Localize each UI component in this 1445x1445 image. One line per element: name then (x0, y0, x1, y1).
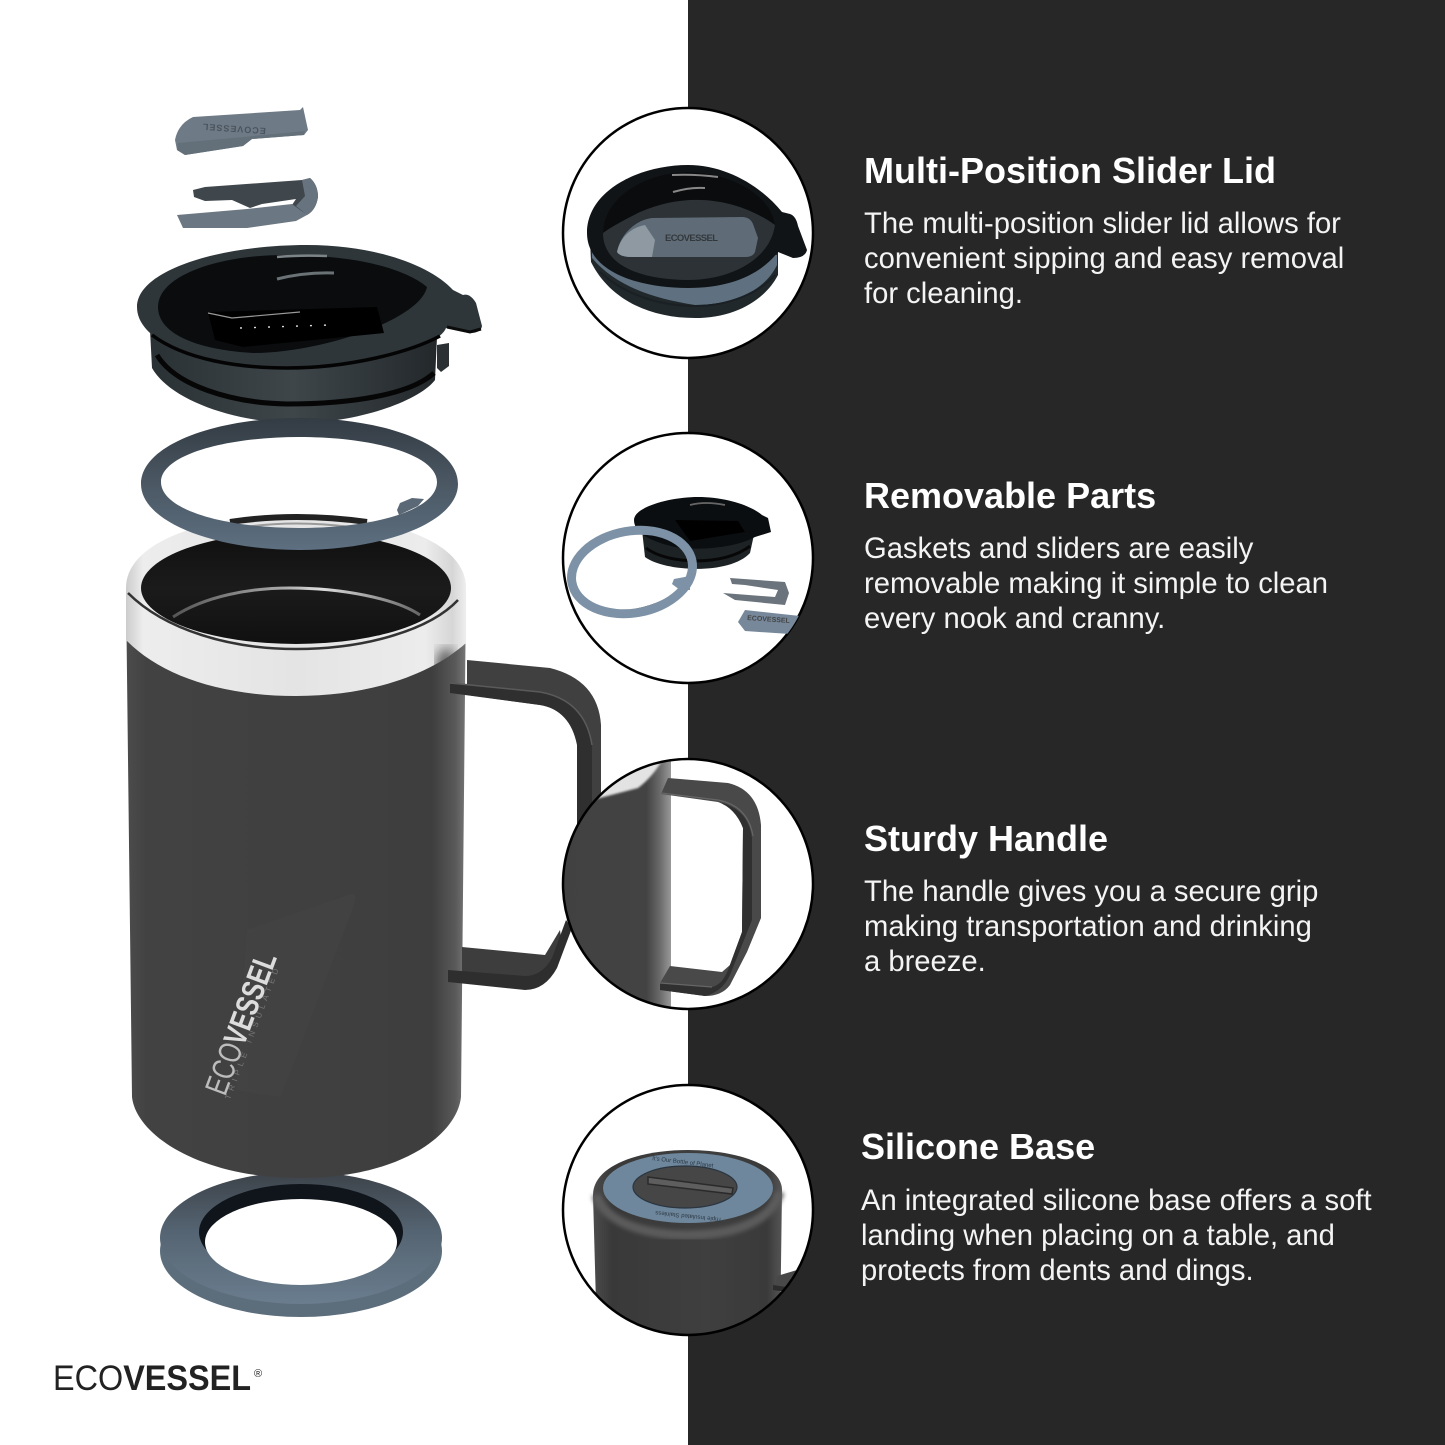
text block: sturdy handle (864, 818, 1318, 978)
mug handle (448, 660, 601, 990)
heading: Silicone Base (861, 1126, 1095, 1167)
rim band (126, 515, 466, 696)
small ring (567, 526, 697, 618)
slot (648, 1177, 733, 1194)
description: The handle gives you a secure grip (864, 876, 1318, 908)
description: every nook and cranny. (864, 603, 1165, 635)
zoomed handle (660, 778, 761, 996)
silicone ring (603, 1153, 773, 1223)
panel: base circle: Triple Insulated Stainless (655, 1209, 722, 1222)
handle stub (780, 1270, 796, 1287)
description: protects from dents and dings. (861, 1255, 1254, 1287)
icon: lower slider piece (177, 178, 318, 228)
description: convenient sipping and easy removal (864, 243, 1344, 275)
heading: Removable Parts (864, 475, 1156, 516)
panel: removable parts circle: ECOVESSEL (747, 615, 791, 625)
exploded mug illustration (126, 107, 601, 1317)
description: An integrated silicone base offers a soft (861, 1185, 1372, 1217)
panel: handle circle (560, 750, 813, 1020)
mug body: TRIPLE INSULATED (223, 963, 282, 1101)
band shadow (434, 644, 458, 665)
heading: Multi-Position Slider Lid (864, 150, 1276, 191)
mug body (126, 515, 466, 1178)
dark background panel (688, 0, 1445, 1445)
mug interior (141, 532, 451, 644)
base ring (160, 1172, 442, 1317)
small lid (642, 534, 754, 569)
description: a breeze. (864, 946, 986, 978)
small ring shadow (636, 601, 660, 608)
panel: lid circle (563, 108, 813, 358)
gasket ring (141, 418, 458, 550)
text block: slider lid (864, 150, 1344, 310)
panel: removable parts circle (563, 433, 813, 683)
description: removable making it simple to clean (864, 568, 1328, 600)
text block: removable parts (864, 475, 1328, 635)
logo: EcoVessel wordmark: ECOVESSEL (53, 1359, 251, 1398)
small slider two (738, 610, 800, 634)
icon: upper slider piece (175, 107, 308, 155)
icon: lid (137, 245, 482, 423)
description: for cleaning. (864, 278, 1023, 310)
heading: Sturdy Handle (864, 818, 1108, 859)
icon: upper slider piece: ECOVESSEL (202, 122, 266, 136)
description: making transportation and drinking (864, 911, 1312, 943)
logo facet highlight (236, 894, 355, 1097)
description: Gaskets and sliders are easily (864, 533, 1254, 565)
panel: base circle: It's Our Bottle of Planet (652, 1156, 714, 1170)
panel: lid circle: ECOVESSEL (665, 233, 718, 244)
registered mark: ® (254, 1368, 262, 1380)
description: The multi-position slider lid allows for (864, 208, 1341, 240)
logo on mug: ECOVESSEL (198, 947, 284, 1099)
text block: silicone base (861, 1126, 1372, 1287)
description: landing when placing on a table, and (861, 1220, 1335, 1252)
gasket tab (397, 498, 424, 515)
small slider (723, 578, 789, 605)
panel: base circle (563, 1085, 813, 1340)
